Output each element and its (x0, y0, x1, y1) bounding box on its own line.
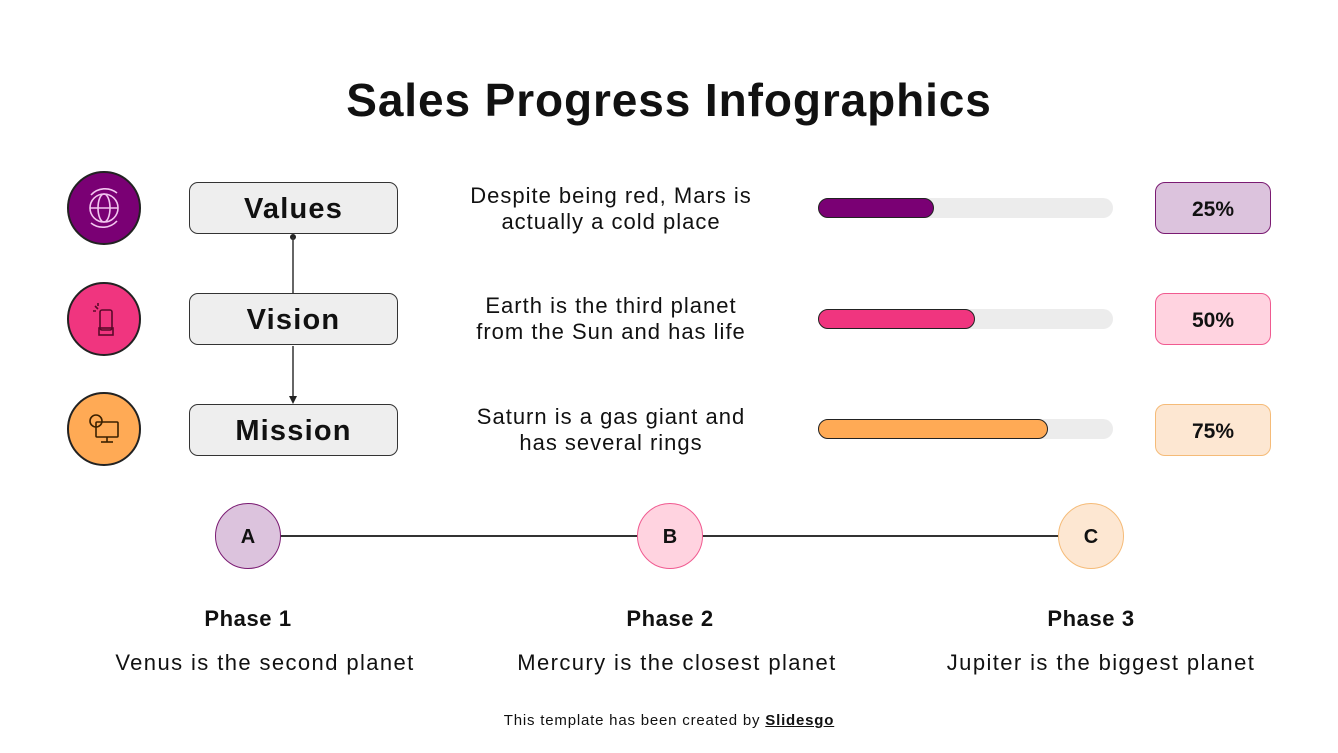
timeline circle A (215, 503, 281, 569)
title: Sales Progress Infographics (346, 74, 992, 126)
text: values description (470, 183, 752, 234)
phase 3 description: Jupiter is the biggest planet (947, 650, 1255, 675)
box: mission (189, 404, 398, 456)
bar: 25% (818, 198, 1113, 218)
badge: 25% (1155, 182, 1271, 234)
icon: hand (67, 282, 141, 356)
text: mission description: Saturn is a gas giant and (477, 404, 745, 429)
box: values: Values (244, 193, 343, 225)
bar: 75% (818, 419, 1113, 439)
timeline circle C (1058, 503, 1124, 569)
text: vision description: from the Sun and has life (476, 319, 746, 344)
phase 2 description: Mercury is the closest planet (517, 650, 837, 675)
phase 1 label: Phase 1 (204, 606, 292, 631)
box: values (189, 182, 398, 234)
box: mission: Mission (235, 415, 352, 447)
badge: 50% (1155, 293, 1271, 345)
icon: globe (67, 171, 141, 245)
bar: 50% (818, 309, 1113, 329)
timeline circle A: A (241, 526, 255, 548)
timeline circle B (637, 503, 703, 569)
text: values description: actually a cold place (501, 209, 721, 234)
phase 2 label: Phase 2 (626, 606, 714, 631)
text: mission description: has several rings (519, 430, 703, 455)
text: vision description (476, 293, 746, 344)
box: vision: Vision (247, 304, 340, 336)
badge: 50%: 50% (1192, 309, 1234, 332)
text: vision description: Earth is the third planet (485, 293, 737, 318)
badge: 75%: 75% (1192, 420, 1234, 443)
phase 3 label: Phase 3 (1047, 606, 1135, 631)
timeline circle B: B (663, 526, 677, 548)
phase 1 description: Venus is the second planet (115, 650, 415, 675)
connector arrows (289, 234, 297, 404)
badge: 25%: 25% (1192, 198, 1234, 221)
badge: 75% (1155, 404, 1271, 456)
timeline line (248, 535, 1091, 537)
timeline circle C: C (1084, 526, 1098, 548)
box: vision (189, 293, 398, 345)
icon: computer (67, 392, 141, 466)
footer: This template has been created by Slidesgo (504, 712, 834, 729)
text: mission description (477, 404, 745, 455)
text: values description: Despite being red, Mars is (470, 183, 752, 208)
